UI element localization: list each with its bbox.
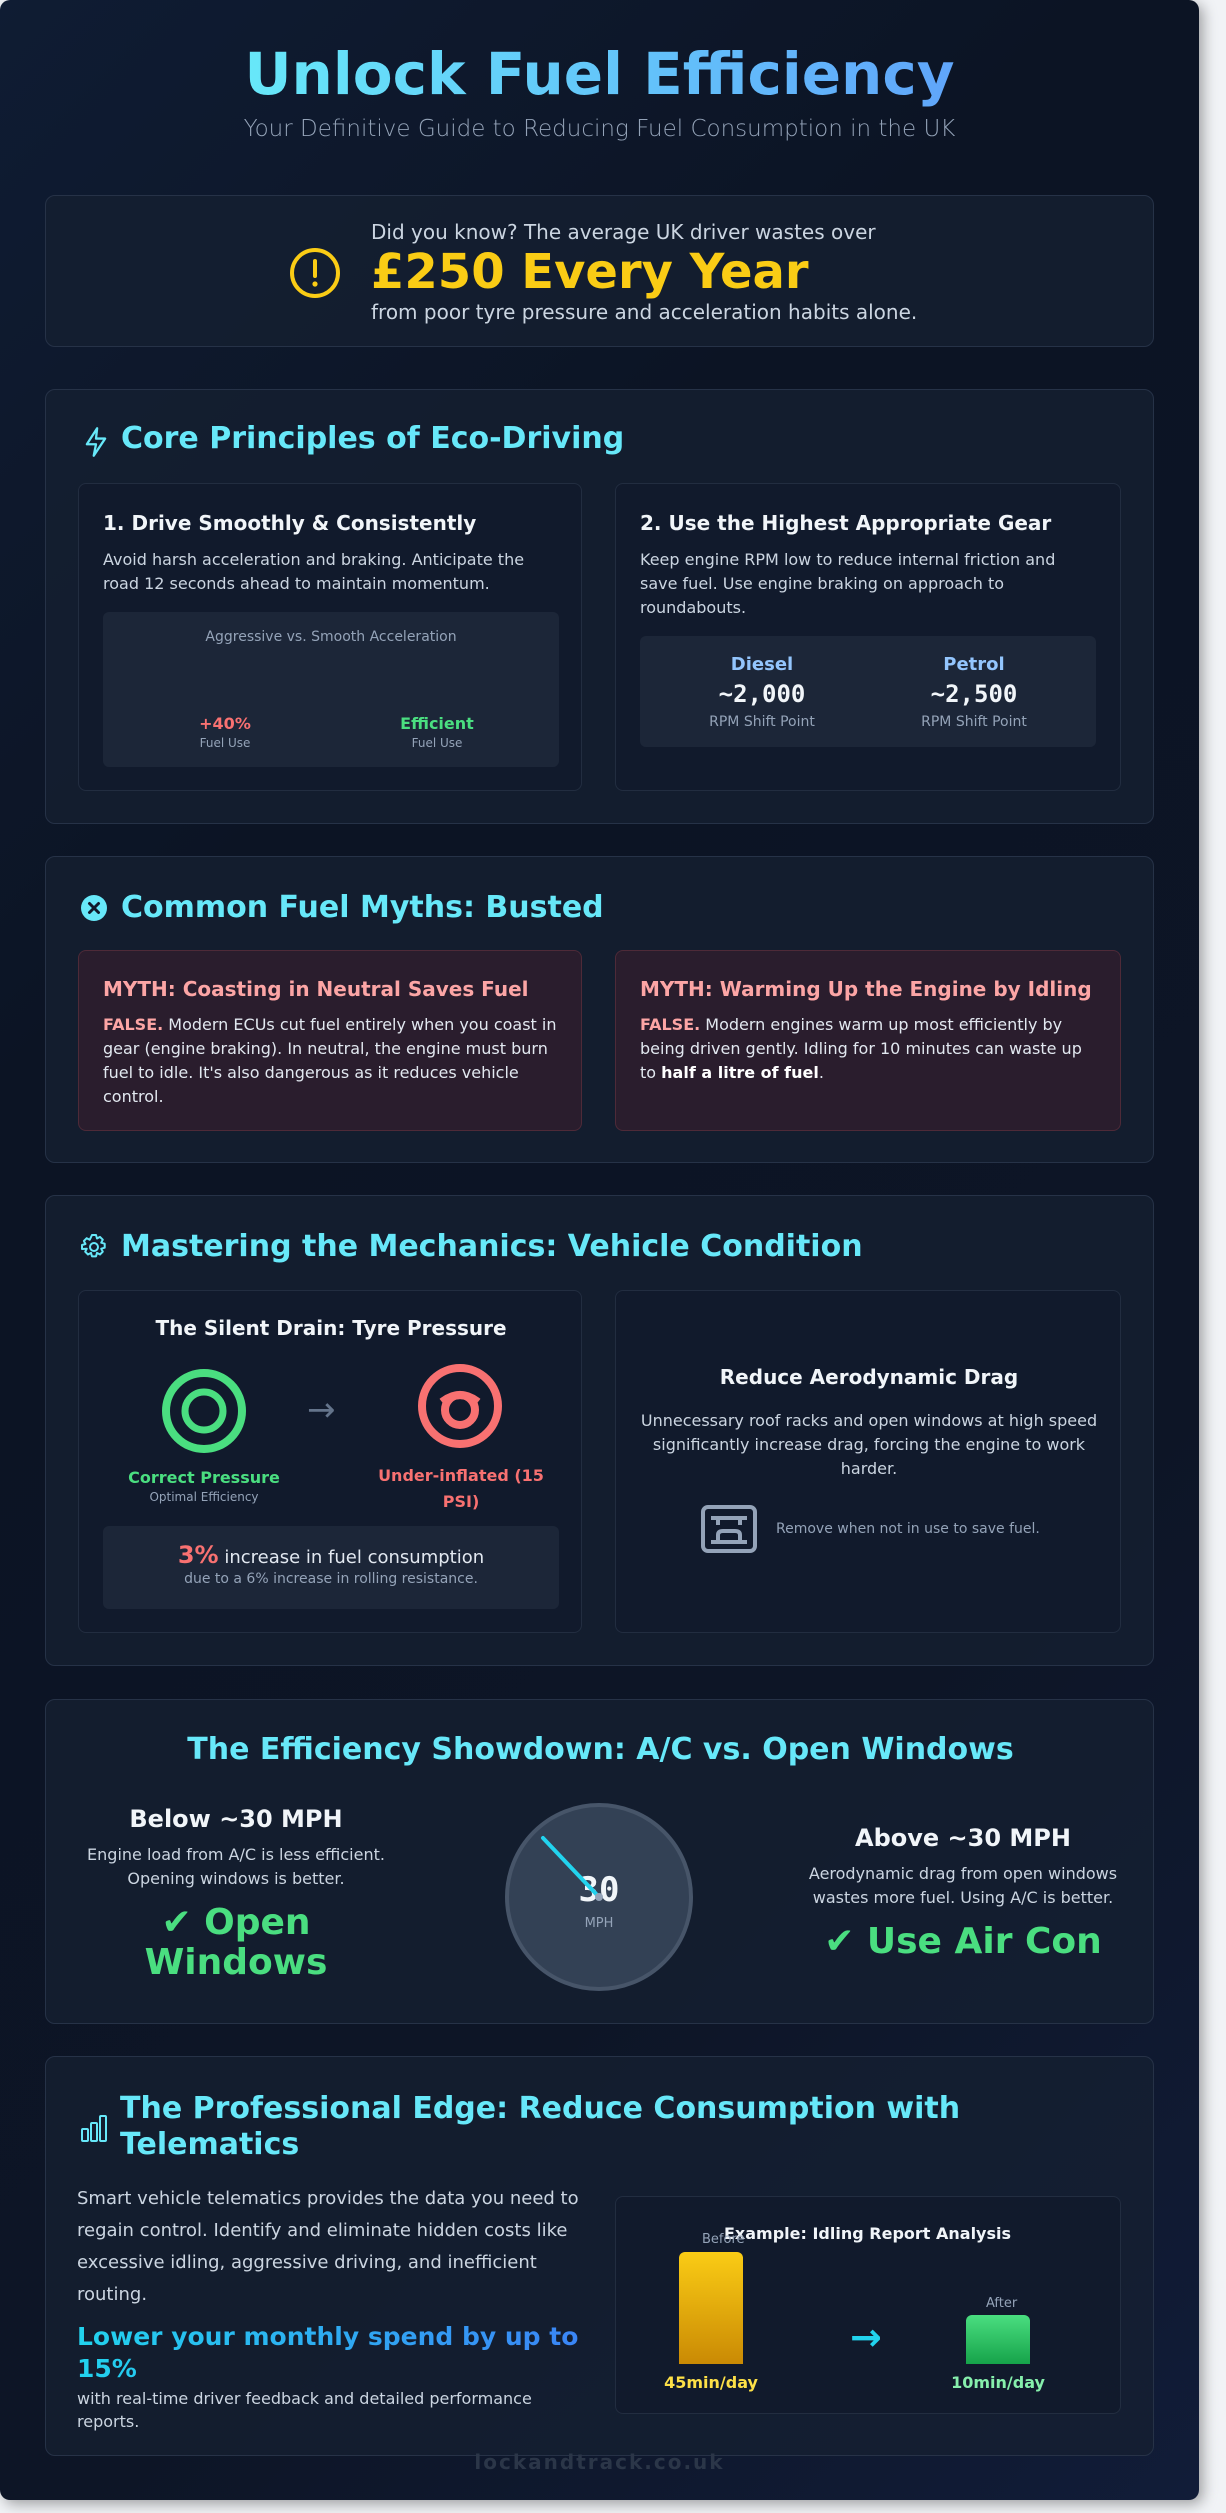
column: below 30: Opening windows is better. (127, 1869, 345, 1888)
callout text: from poor tyre pressure and acceleration habits alone. (371, 300, 917, 324)
card: highest gear: Keep engine RPM low to reduce internal friction and save fuel. Use engine braking on approach to roundabouts. (640, 550, 1055, 617)
stat box: due to a 6% increase in rolling resistance. (184, 1571, 478, 1587)
icon: lightning (86, 427, 106, 457)
text block: Smart vehicle telematics provides the data you need to regain control. Identify and eliminate hidden costs like excessive idling, aggressive driving, and inefficient routing. (77, 2188, 579, 2305)
card: drive smoothly (78, 483, 582, 791)
label correct: Optimal Efficiency (149, 1490, 259, 1504)
icon: correct tyre (162, 1369, 246, 1453)
panel: myths (45, 856, 1154, 1163)
chart: aggressive vs smooth: Fuel Use (200, 736, 250, 750)
card: aerodynamic drag: Unnecessary roof racks and open windows at high speed significantly increase drag, forcing the engine to work harder. (641, 1411, 1097, 1478)
chart: idling report: 45min/day (664, 2373, 758, 2392)
chart: aggressive vs smooth (103, 612, 559, 767)
bar after (966, 2315, 1030, 2364)
rpm stats: Petrol (943, 654, 1005, 675)
text block: Lower your monthly spend by up to 15% (77, 2322, 578, 2383)
icon: x circle (81, 895, 107, 921)
heading: The Professional Edge: Reduce Consumption with Telematics (120, 2091, 960, 2162)
rpm stats: RPM Shift Point (709, 714, 815, 730)
gauge (505, 1803, 693, 1991)
column: above 30: Above ~30 MPH (855, 1824, 1071, 1852)
label correct: Correct Pressure (128, 1468, 280, 1487)
card: drive smoothly: Avoid harsh acceleration and braking. Anticipate the road 12 seconds ahead to maintain momentum. (103, 550, 524, 593)
label under-inflated: Under-inflated (15 PSI) (378, 1466, 544, 1511)
column: below 30: Windows (145, 1942, 327, 1983)
chart: aggressive vs smooth: Fuel Use (412, 736, 462, 750)
chart: idling report: After (986, 2296, 1017, 2311)
rpm stats: ~2,000 (719, 680, 805, 708)
column: above 30: Aerodynamic drag from open windows (809, 1864, 1117, 1883)
icon: alert circle (290, 248, 340, 298)
panel: core principles (45, 389, 1154, 824)
callout text (371, 220, 917, 324)
text block (77, 2188, 579, 2431)
rpm stats: Diesel (731, 654, 793, 675)
bar before (679, 2252, 743, 2364)
column: above 30 (809, 1824, 1117, 1962)
title: Unlock Fuel Efficiency (244, 40, 955, 108)
column: below 30: Below ~30 MPH (129, 1805, 343, 1833)
label correct (128, 1468, 280, 1504)
card: drive smoothly: 1. Drive Smoothly & Consistently (103, 511, 476, 535)
card: myth idling: FALSE. Modern engines warm up most efficiently by being driven gently. Idling for 10 minutes can waste up to half a litre of fuel. (640, 1015, 1082, 1082)
footer: lockandtrack.co.uk (474, 2450, 725, 2474)
panel: showdown (45, 1699, 1154, 2024)
arrow: → (307, 1390, 336, 1430)
card: myth coasting: FALSE. Modern ECUs cut fuel entirely when you coast in gear (engine braking). In neutral, the engine must burn fuel to idle. It's also dangerous as it reduces vehicle control. (103, 1015, 556, 1106)
stat box (103, 1526, 559, 1609)
card: highest gear: 2. Use the Highest Appropriate Gear (640, 511, 1051, 535)
column: below 30: Engine load from A/C is less efficient. (87, 1845, 385, 1864)
icon: bar chart (81, 2115, 107, 2142)
icon: roof rack (701, 1505, 757, 1553)
heading: Core Principles of Eco-Driving (121, 421, 624, 456)
card: myth idling: MYTH: Warming Up the Engine by Idling (640, 977, 1092, 1001)
rpm stats: ~2,500 (931, 680, 1017, 708)
card: tyre pressure: The Silent Drain: Tyre Pressure (155, 1316, 507, 1340)
card: tyre pressure (78, 1290, 582, 1633)
card: myth coasting (78, 950, 582, 1131)
rpm stats (640, 636, 1096, 747)
chart: aggressive vs smooth: Aggressive vs. Smooth Acceleration (205, 629, 457, 645)
column: below 30 (87, 1805, 385, 1983)
card: highest gear (615, 483, 1121, 791)
card: myth coasting: MYTH: Coasting in Neutral Saves Fuel (103, 977, 529, 1001)
caption: Remove when not in use to save fuel. (776, 1521, 1040, 1537)
column: above 30: wastes more fuel. Using A/C is better. (813, 1888, 1113, 1907)
callout text: Did you know? The average UK driver wastes over (371, 220, 876, 244)
card: aerodynamic drag (615, 1290, 1121, 1633)
column: above 30: ✔ Use Air Con (824, 1921, 1102, 1962)
heading: Mastering the Mechanics: Vehicle Condition (121, 1229, 863, 1264)
gauge: MPH (585, 1916, 613, 1931)
icon: under-inflated tyre (418, 1364, 502, 1448)
text block: with real-time driver feedback and detailed performance reports. (77, 2389, 532, 2431)
chart: idling report: 10min/day (951, 2373, 1045, 2392)
card: aerodynamic drag: Reduce Aerodynamic Drag (720, 1365, 1018, 1389)
column: below 30: ✔ Open (161, 1902, 311, 1943)
heading: The Efficiency Showdown: A/C vs. Open Windows (187, 1732, 1014, 1767)
chart: idling report (615, 2196, 1121, 2414)
chart: aggressive vs smooth: Efficient (400, 714, 474, 733)
icon: gear (81, 1234, 106, 1258)
chart: aggressive vs smooth: +40% (199, 714, 251, 733)
gauge: 30 (579, 1870, 619, 1910)
panel: mechanics (45, 1195, 1154, 1666)
panel: telematics (45, 2056, 1154, 2456)
heading: Common Fuel Myths: Busted (121, 890, 604, 925)
stat box: 3% increase in fuel consumption (178, 1541, 484, 1569)
rpm stats: RPM Shift Point (921, 714, 1027, 730)
card: myth idling (615, 950, 1121, 1131)
subtitle: Your Definitive Guide to Reducing Fuel Consumption in the UK (244, 116, 955, 142)
arrow: → (850, 2315, 882, 2359)
chart: idling report: Before (702, 2232, 745, 2247)
callout: did you know (45, 195, 1154, 347)
chart: idling report: Example: Idling Report Analysis (724, 2224, 1011, 2243)
callout text: £250 Every Year (371, 244, 809, 300)
